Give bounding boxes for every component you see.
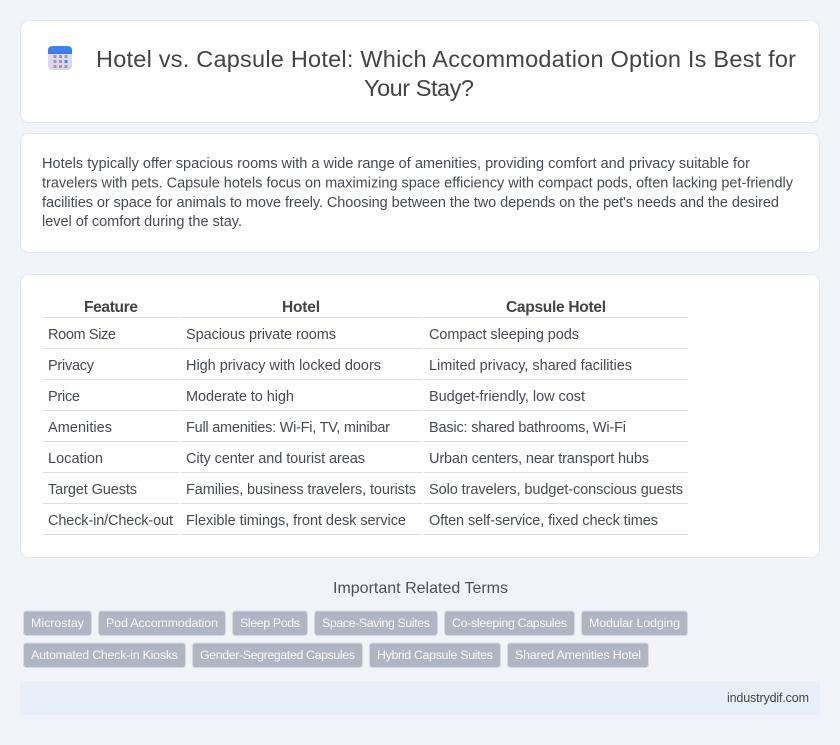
table header row: Hotel <box>282 299 320 316</box>
tag: Sleep Pods: Sleep Pods <box>240 616 300 630</box>
table row: check-in/check-out: Flexible timings, front desk service <box>186 513 406 529</box>
summary text block <box>42 156 794 230</box>
table header row: Capsule Hotel <box>506 299 606 316</box>
summary text block: travelers with pets. Capsule hotels focus on maximizing space efficiency with compact pods, often lacking pet-friendly <box>42 176 794 192</box>
tag: Co-sleeping Capsules: Co-sleeping Capsules <box>452 616 567 630</box>
tag: Modular Lodging <box>582 611 688 636</box>
panel: summary <box>20 134 820 252</box>
title: Your Stay? <box>364 75 474 101</box>
panel: comparison table <box>20 274 820 558</box>
footer: industrydif.com <box>727 691 809 705</box>
summary text block: facilities or space for animals to move freely. Choosing between the two depends on the pet's needs and the desired <box>42 195 779 211</box>
tag: Modular Lodging: Modular Lodging <box>589 616 680 630</box>
table row: check-in/check-out: Often self-service, fixed check times <box>429 513 658 529</box>
table row: amenities <box>43 420 688 442</box>
table row: target guests: Solo travelers, budget-conscious guests <box>429 482 683 498</box>
tag: Shared Amenities Hotel: Shared Amenities Hotel <box>515 648 641 662</box>
table row: target guests: Target Guests <box>48 482 137 498</box>
tag: Microstay: Microstay <box>31 616 85 630</box>
table row: price: Moderate to high <box>186 389 294 405</box>
footer <box>20 681 820 715</box>
table row: target guests: Families, business travelers, tourists <box>186 482 416 498</box>
tag: Pod Accommodation <box>98 611 226 636</box>
summary text block: level of comfort during the stay. <box>42 214 242 230</box>
icon: calendar <box>48 46 72 70</box>
title <box>96 46 796 101</box>
tag: Shared Amenities Hotel <box>508 643 648 668</box>
table row: room size: Compact sleeping pods <box>429 327 579 343</box>
table row: room size: Spacious private rooms <box>186 327 336 343</box>
table row: room size <box>43 327 688 349</box>
table row: price: Price <box>48 389 80 405</box>
table row: location <box>43 451 688 473</box>
table row: privacy <box>43 358 688 380</box>
table row: privacy: Privacy <box>48 358 95 374</box>
table row: location: City center and tourist areas <box>186 451 365 467</box>
title: Hotel vs. Capsule Hotel: Which Accommodation Option Is Best for <box>96 46 796 72</box>
tag: Pod Accommodation: Pod Accommodation <box>106 616 218 630</box>
table row: price: Budget-friendly, low cost <box>429 389 585 405</box>
table row: room size: Room Size <box>48 327 116 343</box>
tag: Automated Check-in Kiosks: Automated Check-in Kiosks <box>31 648 178 662</box>
table row: price <box>43 389 688 411</box>
table header row: Feature <box>84 299 138 316</box>
table row: amenities: Amenities <box>48 420 112 436</box>
tag: Sleep Pods <box>232 611 308 636</box>
heading: important related terms: Important Related Terms <box>333 580 508 597</box>
table row: privacy: Limited privacy, shared facilities <box>429 358 632 374</box>
tag: Hybrid Capsule Suites: Hybrid Capsule Suites <box>377 648 493 662</box>
table row: check-in/check-out: Check-in/Check-out <box>48 513 173 529</box>
table row: check-in/check-out <box>43 513 688 535</box>
tag: Gender-Segregated Capsules <box>192 643 362 668</box>
table header row <box>43 299 688 318</box>
table row: privacy: High privacy with locked doors <box>186 358 381 374</box>
table row: location: Location <box>48 451 103 467</box>
tag: Space-Saving Suites: Space-Saving Suites <box>322 616 430 630</box>
tag: Automated Check-in Kiosks <box>24 643 186 668</box>
table row: amenities: Full amenities: Wi-Fi, TV, minibar <box>186 420 390 436</box>
tag: Gender-Segregated Capsules: Gender-Segregated Capsules <box>200 648 355 662</box>
tag: Co-sleeping Capsules <box>444 611 574 636</box>
related terms tags <box>24 611 688 668</box>
tag: Hybrid Capsule Suites <box>370 643 500 668</box>
panel: title header <box>20 20 820 122</box>
summary text block: Hotels typically offer spacious rooms with a wide range of amenities, providing comfort and privacy suitable for <box>42 156 750 172</box>
table row: location: Urban centers, near transport hubs <box>429 451 649 467</box>
table row: amenities: Basic: shared bathrooms, Wi-Fi <box>429 420 626 436</box>
table row: target guests <box>43 482 688 504</box>
tag: Space-Saving Suites <box>314 611 438 636</box>
tag: Microstay <box>24 611 92 636</box>
